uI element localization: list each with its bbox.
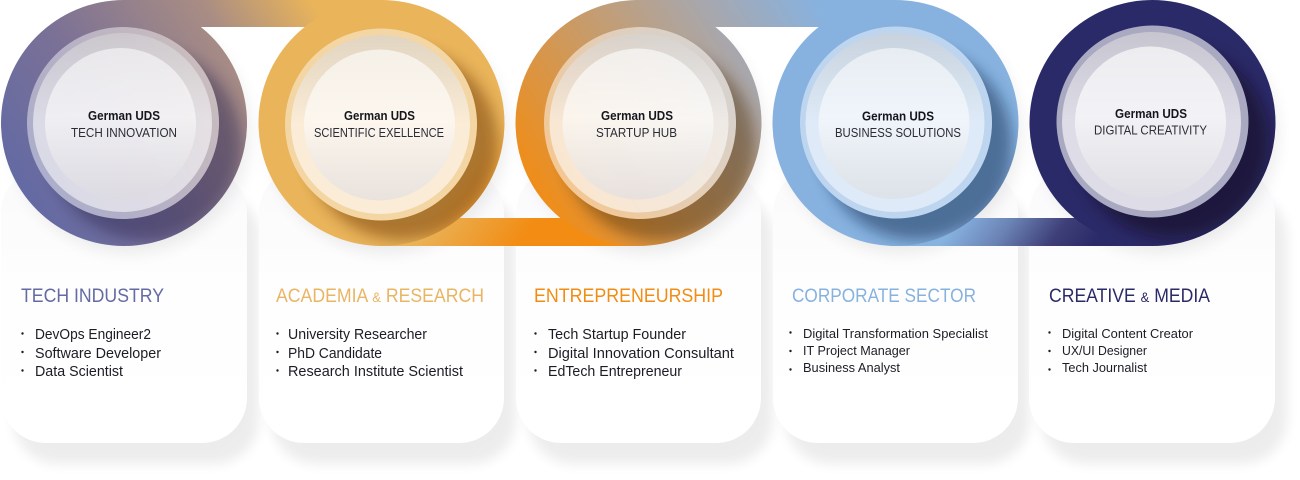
arrow: connector band bottom academia to startup	[381, 218, 639, 246]
list: tech industry roles	[21, 327, 161, 380]
list: tech industry roles: Data Scientist	[35, 364, 123, 380]
list: academia roles	[276, 327, 463, 380]
circle label: BUSINESS SOLUTIONS	[835, 126, 961, 140]
arrow: connector band top startup to business	[638, 0, 896, 27]
list: academia roles: PhD Candidate	[288, 346, 382, 362]
panel: academia and research	[259, 168, 516, 464]
heading: tech industry: TECH INDUSTRY	[21, 286, 164, 307]
heading: entrepreneurship: ENTREPRENEURSHIP	[534, 286, 723, 307]
circle soft shadows on cards	[10, 13, 1278, 253]
list: academia roles: University Researcher	[288, 327, 427, 343]
cards row	[1, 168, 1287, 464]
circle: tech innovation	[1, 0, 247, 246]
panel: tech industry	[1, 168, 259, 464]
circle label: DIGITAL CREATIVITY	[1094, 124, 1208, 138]
circle label	[1094, 106, 1208, 138]
list: entrepreneurship roles: Tech Startup Founder	[548, 327, 686, 343]
panel: creative and media	[1029, 168, 1287, 464]
list: corporate roles: IT Project Manager	[803, 343, 911, 358]
arrow: connector band top tech to academia	[124, 0, 382, 27]
circle: digital creativity	[1030, 0, 1276, 246]
list: creative roles	[1048, 326, 1194, 375]
circle label: TECH INNOVATION	[71, 126, 177, 140]
circle label: German UDS	[862, 108, 934, 124]
list: academia roles: Research Institute Scientist	[288, 364, 463, 380]
list: tech industry roles: Software Developer	[35, 346, 161, 362]
panel: corporate sector	[773, 168, 1030, 464]
list: entrepreneurship roles: Digital Innovation Consultant	[548, 346, 734, 362]
list: tech industry roles: DevOps Engineer2	[35, 327, 151, 343]
panel: entrepreneurship	[516, 168, 773, 464]
list: entrepreneurship roles: EdTech Entrepreneur	[548, 364, 682, 380]
list: creative roles: Tech Journalist	[1062, 360, 1147, 375]
heading: creative and media: CREATIVE & MEDIA	[1049, 286, 1210, 307]
circle label: German UDS	[1115, 106, 1187, 121]
list: creative roles: Digital Content Creator	[1062, 326, 1194, 341]
circle label	[71, 108, 177, 140]
list: corporate roles	[789, 326, 988, 375]
circle label	[835, 108, 961, 140]
list: corporate roles: Digital Transformation Specialist	[803, 326, 988, 341]
list: creative roles: UX/UI Designer	[1062, 343, 1148, 358]
circle: scientific excellence	[258, 0, 504, 246]
circle label: SCIENTIFIC EXELLENCE	[314, 126, 444, 140]
circle label: STARTUP HUB	[596, 126, 677, 140]
circle label: German UDS	[344, 108, 415, 123]
circle label: German UDS	[601, 108, 673, 123]
circle label	[314, 108, 444, 140]
circle label: German UDS	[88, 108, 160, 123]
list: corporate roles: Business Analyst	[803, 360, 900, 375]
heading: academia and research: ACADEMIA & RESEARCH	[276, 286, 484, 307]
heading: corporate sector: CORPORATE SECTOR	[792, 286, 976, 307]
arrow: connector band bottom business to digital	[895, 218, 1153, 246]
circle: business solutions	[772, 0, 1018, 246]
list: entrepreneurship roles	[534, 327, 734, 380]
circle: startup hub	[516, 0, 762, 246]
circle label	[596, 108, 677, 140]
